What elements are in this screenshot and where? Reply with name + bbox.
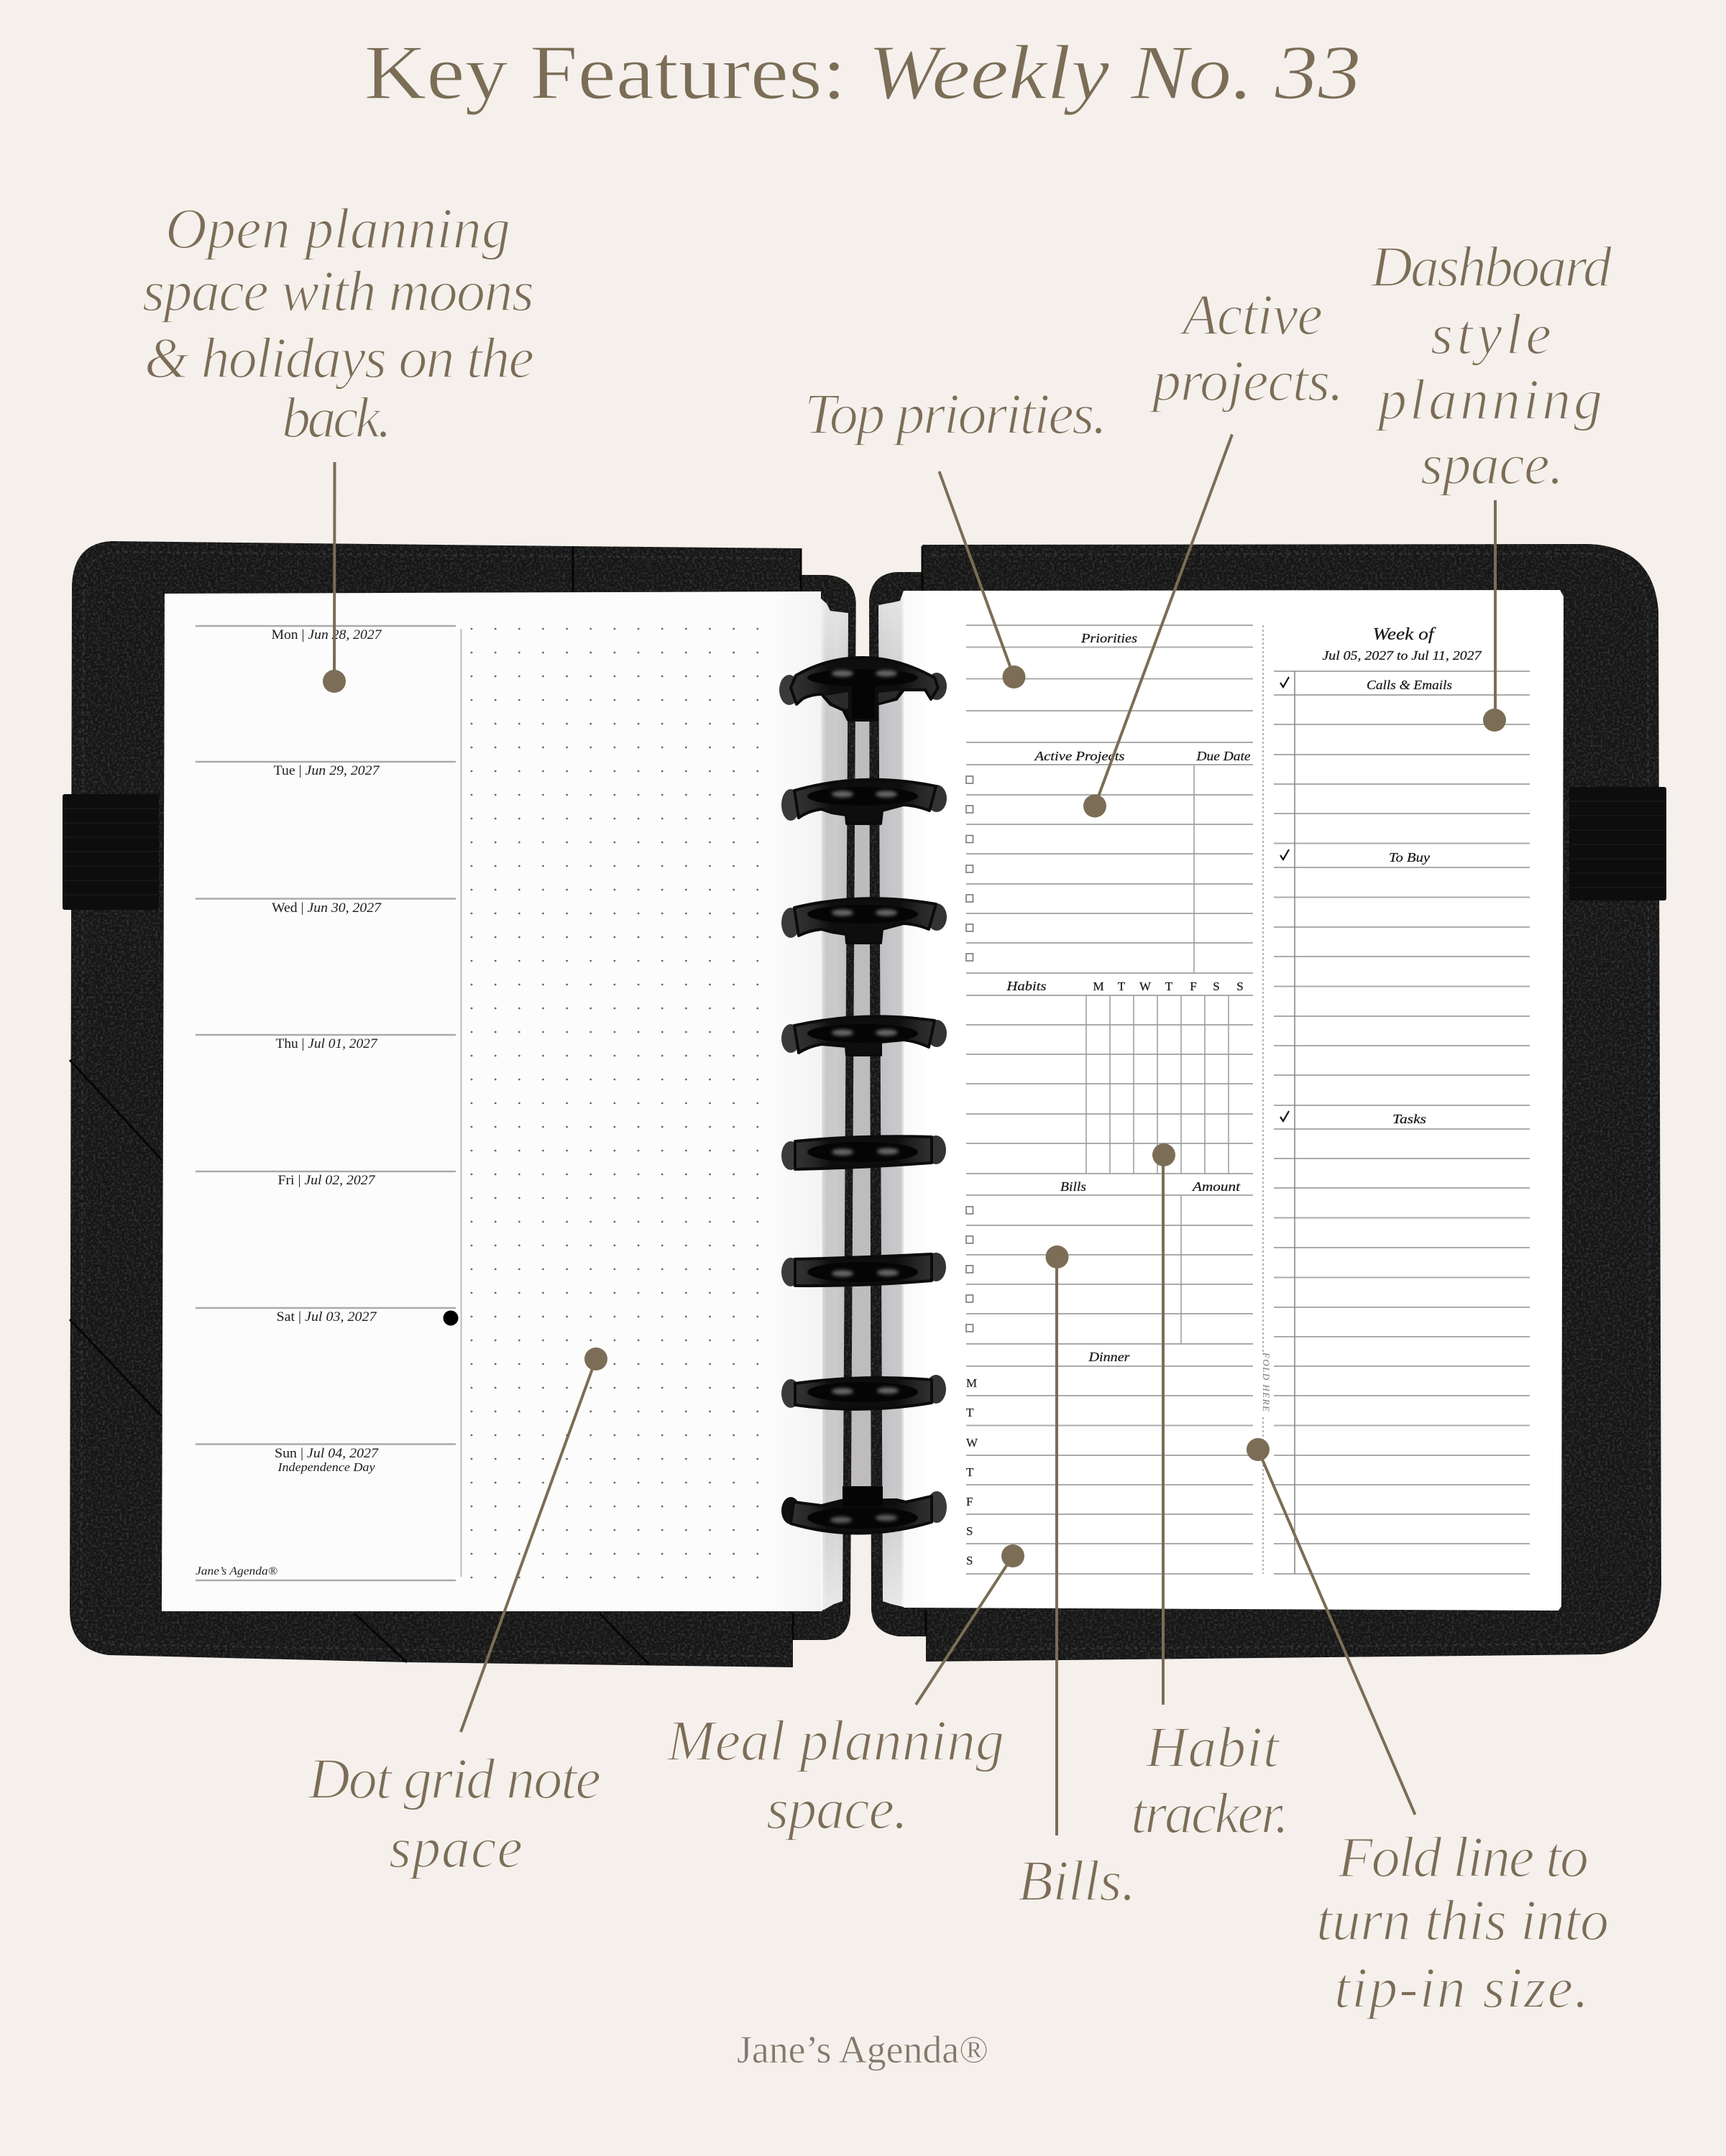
page gutter shading xyxy=(769,594,821,1610)
footer brand: Jane’s Agenda® xyxy=(737,2028,988,2071)
divider xyxy=(460,629,462,1577)
habit weekdays: S xyxy=(1236,980,1244,993)
title: Key Features: Weekly No. 33 xyxy=(364,30,1362,116)
ring 7 xyxy=(781,1375,946,1409)
callout: open planning xyxy=(142,198,534,693)
binder rings xyxy=(779,658,947,1534)
left elastic band xyxy=(63,794,159,910)
habit weekdays: T xyxy=(1165,980,1173,993)
callout: dot grid: space xyxy=(389,1817,523,1880)
heading: Amount: Amount xyxy=(1192,1179,1241,1194)
check icons xyxy=(1280,677,1289,1121)
icon: new moon xyxy=(443,1311,459,1325)
heading: Habits: Habits xyxy=(1006,979,1047,993)
heading: Week of: Week of xyxy=(1373,625,1436,644)
right elastic band xyxy=(1569,787,1666,900)
callout: top priorities: Top priorities. xyxy=(804,383,1107,446)
callout: top priorities xyxy=(804,383,1107,688)
callout: dashboard: space. xyxy=(1420,433,1564,497)
heading: Bills: Bills xyxy=(1060,1179,1086,1194)
callout: fold line: tip-in size. xyxy=(1334,1957,1589,2020)
left page xyxy=(162,591,822,1611)
left column rules xyxy=(966,625,1253,1574)
callout: open planning: & holidays on the xyxy=(144,327,534,390)
heading: Dinner: Dinner xyxy=(1088,1350,1131,1364)
callout: dashboard: Dashboard xyxy=(1370,236,1612,299)
heading: To Buy: To Buy xyxy=(1389,850,1430,865)
callout: fold line xyxy=(1247,1438,1609,2020)
spine gap behind rings xyxy=(849,719,873,1498)
callout: active projects: Active xyxy=(1179,284,1323,347)
ring 3 xyxy=(781,898,947,943)
callout: meal planning: Meal planning xyxy=(666,1710,1004,1773)
day: Mon: Mon | Jun 28, 2027 xyxy=(272,627,382,642)
checkbox column xyxy=(1294,671,1295,1574)
callout: fold line: Fold line to xyxy=(1337,1826,1589,1889)
callout: habit tracker xyxy=(1131,1143,1289,1846)
callout: dot grid: Dot grid note xyxy=(308,1748,601,1811)
week range: Jul 05, 2027 to Jul 11, 2027 xyxy=(1323,648,1482,663)
holiday: Independence Day xyxy=(277,1460,375,1474)
callout: open planning: back. xyxy=(282,387,392,450)
dot grid xyxy=(460,617,769,1590)
callout: meal planning xyxy=(666,1544,1024,1841)
day: Thu: Thu | Jul 01, 2027 xyxy=(276,1036,378,1051)
daily rules xyxy=(196,626,456,1580)
callout: habit tracker: tracker. xyxy=(1131,1782,1289,1846)
callout: bills: Bills. xyxy=(1018,1850,1136,1913)
checkboxes xyxy=(966,776,973,1332)
callout: fold line: turn this into xyxy=(1316,1889,1609,1953)
right leather cover xyxy=(869,544,1661,1662)
callout: bills xyxy=(1018,1245,1136,1913)
heading: Due Date: Due Date xyxy=(1195,749,1251,763)
dinner weekdays: S xyxy=(966,1524,973,1538)
callout: dashboard: planning xyxy=(1374,369,1602,432)
callout: dashboard xyxy=(1370,236,1612,732)
heading: Calls & Emails: Calls & Emails xyxy=(1367,678,1452,692)
habit weekdays: F xyxy=(1190,980,1197,993)
left page stack edge xyxy=(821,599,848,1610)
planner: open binder xyxy=(63,541,1666,1667)
dinner weekdays: S xyxy=(966,1554,973,1567)
callout: open planning: space with moons xyxy=(142,260,534,323)
heading: Priorities: Priorities xyxy=(1080,631,1137,645)
dinner weekdays xyxy=(966,1376,978,1567)
ring 1 xyxy=(779,658,947,720)
habit weekdays: M xyxy=(1093,980,1104,993)
callout: active projects: projects. xyxy=(1149,350,1344,413)
callout: dashboard: style xyxy=(1431,303,1551,367)
callout: dot grid xyxy=(308,1348,607,1880)
dinner weekdays: T xyxy=(966,1465,974,1479)
callout: open planning: Open planning xyxy=(165,198,510,261)
heading: Active Projects: Active Projects xyxy=(1034,749,1124,763)
right page stack edge xyxy=(878,591,904,1607)
habit weekdays: W xyxy=(1139,980,1152,993)
page logo: Jane’s Agenda® xyxy=(196,1565,277,1577)
column separators xyxy=(1086,765,1229,1344)
ring 4 xyxy=(781,1016,947,1055)
day: Tue: Tue | Jun 29, 2027 xyxy=(273,763,380,778)
ring 5 xyxy=(781,1135,946,1170)
dinner weekdays: W xyxy=(966,1436,978,1450)
day: Sun: Sun | Jul 04, 2027 xyxy=(275,1446,380,1461)
callout: meal planning: space. xyxy=(766,1778,908,1841)
callout: active projects xyxy=(1083,284,1344,818)
left leather cover xyxy=(70,541,856,1667)
day: Sat: Sat | Jul 03, 2027 xyxy=(276,1309,377,1325)
right page xyxy=(904,590,1564,1611)
habit weekdays: S xyxy=(1213,980,1220,993)
dinner weekdays: M xyxy=(966,1376,977,1390)
habit weekdays xyxy=(1093,980,1244,993)
day: Wed: Wed | Jun 30, 2027 xyxy=(272,900,382,916)
dinner weekdays: F xyxy=(966,1495,973,1508)
page gutter shading xyxy=(904,592,932,1606)
dinner weekdays: T xyxy=(966,1406,974,1419)
fold line xyxy=(1262,625,1264,1574)
ring 8 xyxy=(781,1486,947,1534)
heading: Tasks: Tasks xyxy=(1392,1112,1426,1126)
right column rules xyxy=(1274,671,1530,1574)
ring 2 xyxy=(781,780,947,824)
ring 6 xyxy=(781,1253,946,1286)
habit weekdays: T xyxy=(1118,980,1126,993)
callout: habit tracker: Habit xyxy=(1145,1716,1280,1779)
day: Fri: Fri | Jul 02, 2027 xyxy=(277,1173,376,1188)
fold label: FOLD HERE xyxy=(1261,1352,1272,1411)
